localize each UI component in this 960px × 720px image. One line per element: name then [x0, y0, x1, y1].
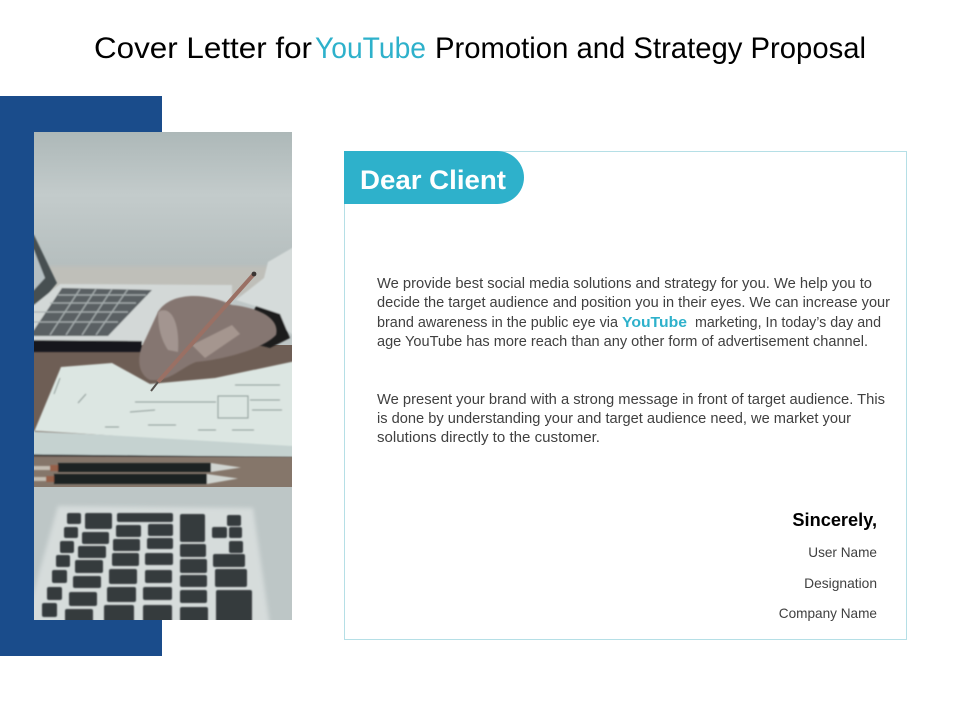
photo: desk: [34, 345, 292, 458]
photo: pens: [20, 463, 241, 484]
title: YouTube: [315, 32, 426, 65]
photo: pencil: [151, 272, 256, 391]
paragraph 1: We provide best social media solutions and strategy for you. We help you to: [377, 276, 872, 292]
photo: keyboard keys: [42, 513, 252, 630]
title: [94, 32, 866, 65]
photo: background ledge: [51, 268, 266, 296]
paragraph 1: age YouTube has more reach than any other form of advertisement channel.: [377, 334, 868, 350]
paragraph 1: YouTube: [622, 315, 687, 331]
signature block: Sincerely,: [792, 510, 877, 530]
photo: paper sheets: [34, 360, 292, 458]
photo: sleeve: [236, 248, 292, 349]
photo: laptop and hand writing on paper: [34, 132, 292, 620]
paragraph 1: [377, 276, 890, 350]
photo: desk strip with pens: [34, 456, 292, 487]
paragraph 2: [377, 392, 885, 446]
heading tab: Dear Client: [344, 151, 524, 204]
heading tab: Dear Client: Dear Client: [360, 165, 506, 195]
photo: lower laptop: [34, 487, 292, 491]
signature block: Designation: [804, 576, 877, 591]
signature block: [779, 510, 877, 621]
signature block: Company Name: [779, 606, 877, 621]
paragraph 2: We present your brand with a strong message in front of target audience. This: [377, 392, 885, 408]
photo: hand: [139, 296, 277, 380]
photo: upper laptop: [34, 234, 232, 353]
paragraph 1: marketing, In today’s day and: [695, 315, 881, 331]
photo: handwriting on paper: [54, 378, 282, 430]
paragraph 1: decide the target audience and position you in their eyes. We can increase your: [377, 295, 890, 311]
paragraph 2: is done by understanding your and target audience need, we market your: [377, 411, 851, 427]
blue side panel: [0, 96, 162, 656]
paragraph 1: brand awareness in the public eye via: [377, 315, 619, 331]
title: Promotion and Strategy Proposal: [435, 32, 866, 65]
signature block: User Name: [808, 545, 877, 560]
paragraph 2: solutions directly to the customer.: [377, 430, 600, 446]
letter panel: [344, 151, 906, 640]
title: Cover Letter for: [94, 32, 312, 65]
photo: keyboard well: [34, 505, 270, 620]
